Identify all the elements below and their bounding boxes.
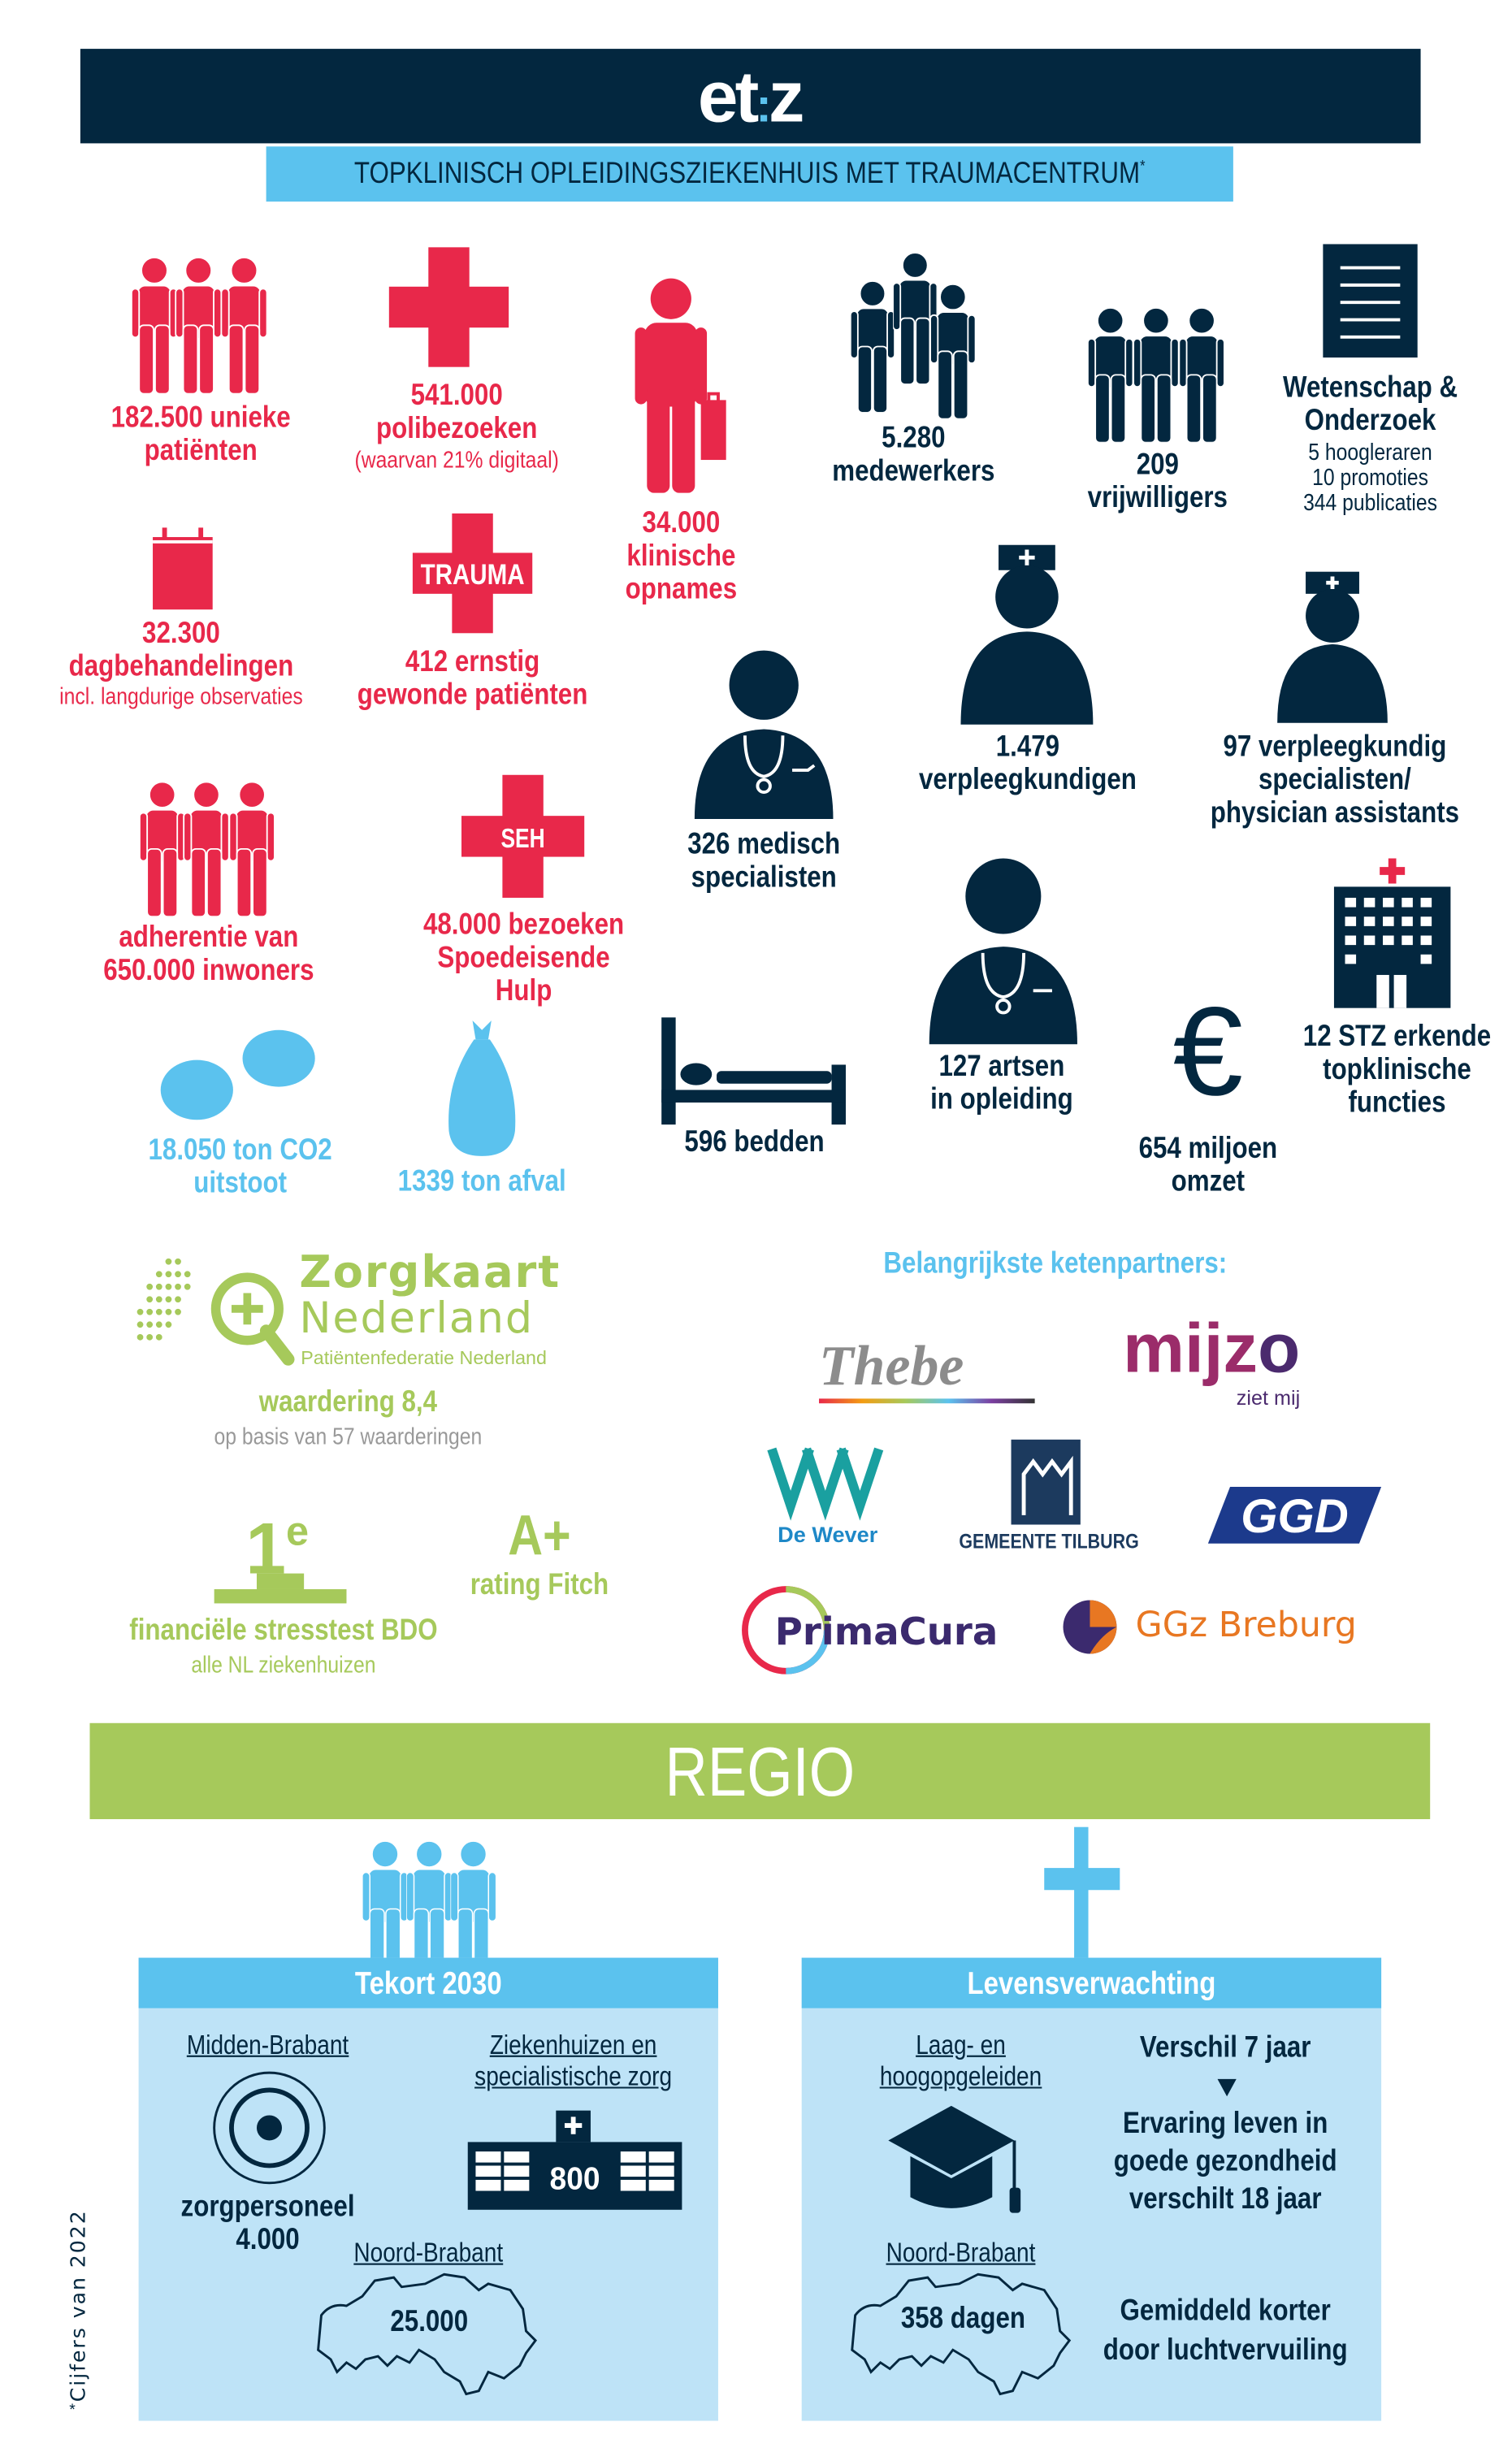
stat: medewerkers: medewerkers: [832, 455, 994, 488]
stat: STZ functies: [1303, 858, 1491, 1120]
logo: mijzo: ziet mij: [1237, 1386, 1300, 1410]
panel header: [139, 1958, 718, 2008]
icon: euro: €: [1173, 981, 1243, 1121]
logo: Thebe: [819, 1336, 1039, 1406]
icon: map with 358 dagen: 358 dagen: [901, 2303, 1025, 2336]
stat: SEH: Spoedeisende: [437, 942, 610, 975]
stat: trauma: [357, 513, 587, 712]
icon: graduation cap: [888, 2106, 1038, 2216]
stat: trauma: 412 ernstig: [405, 646, 539, 679]
panel header: Tekort 2030: [355, 1967, 502, 2002]
stat: verpleegkundig specialisten: 97 verpleegkundig: [1223, 730, 1446, 764]
stat: STZ functies: 12 STZ erkende: [1303, 1020, 1491, 1054]
icon: calendar: [153, 527, 213, 609]
text: Laag- en hoogopgeleiden: hoogopgeleiden: [880, 2062, 1042, 2091]
logo: Gemeente Tilburg: GEMEENTE TILBURG: [959, 1529, 1139, 1553]
stat: vrijwilligers: vrijwilligers: [1088, 482, 1228, 515]
stat: verpleegkundigen: verpleegkundigen: [919, 764, 1137, 797]
icon: podium 1e: [214, 1504, 346, 1605]
logo: Thebe: Thebe: [819, 1334, 964, 1397]
logo: PrimaCura: [740, 1584, 1016, 1679]
stat: A+ rating: A+: [508, 1502, 571, 1567]
logos: partners: [732, 1307, 1394, 1685]
text: Ziekenhuizen: [466, 2030, 680, 2093]
icon: red cross: [388, 247, 509, 367]
stat: medewerkers: [832, 253, 994, 488]
text: Ziekenhuizen: Ziekenhuizen en: [490, 2030, 656, 2060]
stat: verpleegkundig specialisten: [1211, 572, 1459, 830]
stat: polibezoeken: polibezoeken: [376, 413, 537, 446]
text: zorgpersoneel: 4.000: [236, 2224, 300, 2257]
stat: bedden: 596 bedden: [684, 1126, 825, 1159]
stat: vrijwilligers: [1087, 309, 1228, 515]
subtitle bar: [266, 146, 1233, 201]
stat: SEH: [423, 775, 624, 1008]
stat: artsen in opleiding: 127 artsen: [938, 1051, 1064, 1084]
icon: map Noord-Brabant with 25.000: 25.000: [390, 2306, 468, 2339]
icon: hospital: [1334, 858, 1451, 1008]
text: Midden-Brabant: Midden-Brabant: [187, 2030, 349, 2060]
stat: wetenschap & onderzoek: 344 publicaties: [1303, 490, 1437, 517]
text: Noord-Brabant: Noord-Brabant: [886, 2238, 1035, 2268]
stat: polibezoeken: (waarvan 21% digitaal): [354, 448, 559, 474]
stat: verpleegkundigen: 1.479: [996, 730, 1059, 764]
zorgkaart rating: waardering 8,4: [259, 1386, 437, 1419]
stat: dagbehandelingen: incl. langdurige observaties: [59, 683, 303, 710]
stat: afval: 1339 ton afval: [398, 1166, 566, 1198]
stat: omzet: [1139, 981, 1277, 1198]
text: gemiddeld korter: [1105, 2292, 1345, 2371]
icon: three people light blue: [362, 1838, 498, 1961]
stat: CO2: 18.050 ton CO2: [149, 1134, 332, 1167]
stat: STZ functies: topklinische: [1323, 1054, 1471, 1087]
icon: podium 1e: 1: [245, 1508, 286, 1589]
text: Ziekenhuizen: specialistische zorg: [474, 2062, 672, 2091]
panel header: Levensverwachting: [967, 1967, 1215, 2002]
text: gemiddeld korter: door luchtvervuiling: [1103, 2334, 1348, 2368]
zorgkaart logo: Patiëntenfederatie Nederland: [301, 1346, 547, 1369]
stat: dagbehandelingen: [59, 527, 303, 710]
text: ervaring leven: verschilt 18 jaar: [1129, 2183, 1322, 2216]
icon: trauma cross: TRAUMA: [421, 559, 525, 591]
icon: map with magnifier: [136, 1258, 294, 1366]
icon: staggered people: [850, 253, 975, 419]
stat: adherentie: [103, 782, 314, 987]
stat: financiele stresstest: alle NL ziekenhuizen: [191, 1653, 376, 1679]
stat: wetenschap & onderzoek: Onderzoek: [1305, 405, 1436, 438]
stat: unieke patienten: patiënten: [145, 435, 258, 468]
footnote: Cijfers van 2022: Cijfers van 2022: [67, 2209, 91, 2402]
icon: trauma cross: [413, 513, 533, 634]
stat: wetenschap & onderzoek: 10 promoties: [1312, 465, 1428, 492]
stat: omzet: 654 miljoen: [1139, 1133, 1277, 1166]
stat: dagbehandelingen: dagbehandelingen: [69, 651, 293, 683]
icon: clouds: [161, 1030, 315, 1120]
icon: map Noord-Brabant with 25.000: [315, 2268, 544, 2397]
stat: dagbehandelingen: 32.300: [142, 617, 220, 651]
stat: SEH: 48.000 bezoeken: [423, 909, 624, 942]
stat: medisch specialisten: specialisten: [691, 861, 837, 895]
stat: medisch specialisten: [687, 650, 840, 895]
icon: person with bag: [635, 278, 726, 493]
heading: REGIO: REGIO: [665, 1734, 855, 1811]
stat: A+ rating: [457, 1504, 622, 1606]
logo: De Wever: De Wever: [778, 1522, 877, 1547]
text: Verschil 7 jaar: Verschil 7 jaar: [1140, 2032, 1311, 2065]
stat: polibezoeken: [354, 247, 559, 474]
icon: nurse: [960, 544, 1094, 725]
stat: STZ functies: functies: [1348, 1087, 1445, 1120]
logo: De Wever: [760, 1443, 895, 1553]
stat: verpleegkundigen: [919, 544, 1137, 797]
stat: verpleegkundig specialisten: specialisten/: [1259, 764, 1411, 797]
zorgkaart logo: Nederland: [299, 1294, 534, 1344]
text: Noord-Brabant: Noord-Brabant: [353, 2238, 503, 2268]
icon: three people dark: [1089, 309, 1224, 443]
stat: artsen in opleiding: [929, 858, 1077, 1116]
logo: Gemeente Tilburg: [961, 1440, 1137, 1553]
footnote: Cijfers van 2022: *: [69, 2402, 76, 2420]
icon: hospital 800: [468, 2111, 682, 2210]
logo: GGz Breburg: GGz Breburg: [1136, 1606, 1357, 1646]
stat: unieke patienten: 182.500 unieke: [111, 401, 291, 435]
icon: bed: [661, 1017, 846, 1124]
icon: SEH cross: [461, 775, 585, 898]
stat: A+ rating: rating Fitch: [470, 1569, 609, 1601]
text: ervaring leven: [1105, 2106, 1345, 2219]
stat: bedden: [661, 1017, 846, 1159]
subtitle bar: TOPKLINISCH OPLEIDINGSZIEKENHUIS MET TRAUMACENTRUM*: [354, 158, 1146, 191]
stat: vrijwilligers: 209: [1137, 448, 1179, 482]
text: ervaring leven: goede gezondheid: [1114, 2145, 1337, 2178]
text: zorgpersoneel: zorgpersoneel: [181, 2191, 355, 2224]
heading: REGIO: [89, 1723, 1430, 1819]
stat: afval: [398, 1020, 566, 1198]
stat: medisch specialisten: 326 medisch: [687, 829, 840, 861]
text: ervaring leven: Ervaring leven in: [1123, 2108, 1328, 2140]
stat: financiele stresstest: [110, 1504, 457, 1680]
stat: CO2: [149, 1030, 332, 1200]
stat: financiele stresstest: financiële stresstest BDO: [129, 1614, 438, 1648]
zorgkaart rating: op basis van 57 waarderingen: [214, 1423, 482, 1450]
stat: omzet: omzet: [1172, 1166, 1245, 1198]
logo: GGD: GGD: [1241, 1490, 1349, 1543]
heading: ketenpartners: Belangrijkste ketenpartners:: [883, 1247, 1227, 1280]
icon: hospital 800: 800: [550, 2162, 600, 2197]
zorgkaart logo: Zorgkaart: [299, 1246, 561, 1298]
icon: podium 1e: e: [286, 1508, 309, 1554]
zorgkaart rating: [189, 1386, 507, 1455]
logo: GGz Breburg: [1064, 1597, 1371, 1657]
header bar with logo: [80, 49, 1421, 143]
icon: document: [1323, 244, 1418, 357]
logo: etz: et:z: [698, 55, 802, 137]
stat: medewerkers: 5.280: [882, 422, 946, 455]
stat: adherentie: 650.000 inwoners: [103, 955, 314, 987]
stat: wetenschap & onderzoek: Wetenschap &: [1283, 371, 1458, 405]
stat: klinische opnames: 34.000: [643, 507, 720, 540]
logo: PrimaCura: PrimaCura: [775, 1610, 998, 1653]
icon: three people red: [132, 258, 266, 394]
stat: klinische opnames: opnames: [626, 574, 737, 606]
icon: doctor: [694, 650, 834, 819]
text: Laag- en hoogopgeleiden: [881, 2030, 1041, 2093]
text: Laag- en hoogopgeleiden: Laag- en: [916, 2030, 1006, 2060]
panel: Tekort 2030: [139, 1958, 718, 2421]
logo: mijzo: [1123, 1311, 1336, 1413]
zorgkaart logo: [136, 1246, 561, 1369]
panel: Levensverwachting: [802, 1958, 1381, 2421]
arrow: down triangle: [1217, 2079, 1237, 2096]
stat: artsen in opleiding: in opleiding: [930, 1084, 1073, 1116]
icon: nurse small: [1277, 572, 1388, 723]
icon: map with 358 dagen: [849, 2268, 1077, 2397]
stat: adherentie: adherentie van: [119, 921, 298, 955]
stat: SEH: Hulp: [496, 975, 552, 1008]
panel header: [802, 1958, 1381, 2008]
icon: SEH cross: SEH: [500, 823, 545, 853]
stat: unieke patienten: [111, 258, 291, 468]
stat: trauma: gewonde patiënten: [357, 679, 587, 712]
footnote: Cijfers van 2022: [60, 2221, 107, 2418]
logo: mijzo: mijzo: [1123, 1311, 1300, 1388]
icon: three people red: [140, 782, 275, 916]
text: gemiddeld korter: Gemiddeld korter: [1120, 2294, 1331, 2328]
stat: wetenschap & onderzoek: [1283, 244, 1458, 517]
stat: verpleegkundig specialisten: physician assistants: [1211, 797, 1459, 830]
stat: wetenschap & onderzoek: 5 hoogleraren: [1308, 440, 1432, 466]
logo: GGD: [1208, 1487, 1381, 1544]
icon: doctor 2: [929, 858, 1077, 1045]
stat: polibezoeken: 541.000: [411, 379, 503, 413]
stat: klinische opnames: klinische: [626, 540, 735, 574]
stat: klinische opnames: [626, 278, 737, 606]
stat: CO2: uitstoot: [193, 1167, 287, 1200]
icon: target: [211, 2069, 327, 2186]
icon: garbage bag: [448, 1020, 515, 1156]
text: zorgpersoneel: [174, 2191, 362, 2257]
icon: cross light blue: [1044, 1827, 1120, 1960]
